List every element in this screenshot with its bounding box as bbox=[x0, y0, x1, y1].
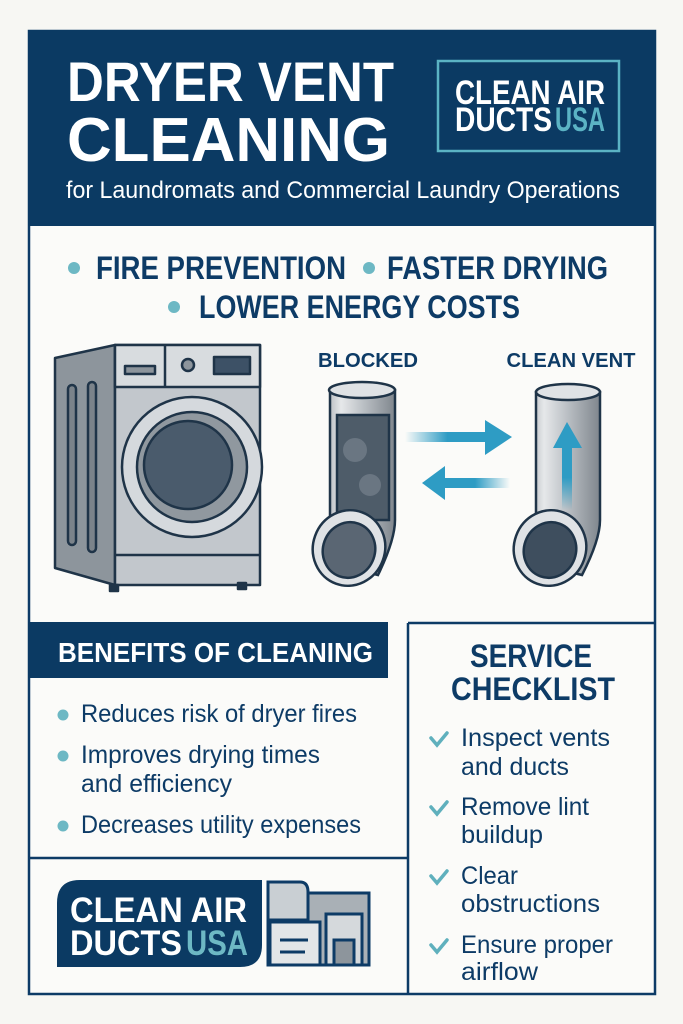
service checklist panel: Inspect vents bbox=[461, 724, 610, 752]
service checklist panel: CHECKLIST bbox=[451, 671, 615, 707]
service checklist panel: Remove lint bbox=[461, 793, 589, 821]
logo box top: DUCTS bbox=[455, 101, 552, 139]
bottom logo: DUCTS bbox=[70, 924, 182, 963]
logo box top: USA bbox=[555, 101, 605, 139]
service checklist panel: SERVICE bbox=[470, 638, 592, 674]
title: CLEANING bbox=[67, 106, 390, 175]
clean vent pipe bbox=[503, 384, 600, 596]
bottom logo: CLEAN AIR bbox=[70, 891, 247, 930]
benefits panel: Reduces risk of dryer fires bbox=[81, 700, 357, 728]
label: clean vent: CLEAN VENT bbox=[506, 350, 636, 372]
title: DRYER VENT bbox=[67, 50, 394, 113]
benefits panel: and efficiency bbox=[81, 770, 232, 798]
key benefits row: FASTER DRYING bbox=[387, 250, 608, 286]
service checklist panel: and ducts bbox=[461, 753, 569, 781]
icon: building bbox=[268, 882, 369, 965]
key benefits row: LOWER ENERGY COSTS bbox=[199, 289, 520, 325]
service checklist panel bbox=[431, 638, 615, 986]
service checklist panel: Ensure proper bbox=[461, 931, 613, 959]
benefits panel: Improves drying times bbox=[81, 741, 320, 769]
service checklist panel: Clear bbox=[461, 862, 518, 890]
bottom logo bbox=[57, 880, 369, 967]
blocked vent pipe bbox=[302, 382, 396, 596]
benefits panel: BENEFITS OF CLEANING bbox=[58, 637, 373, 668]
logo box top bbox=[438, 61, 619, 151]
header panel bbox=[28, 30, 656, 226]
benefits panel: Decreases utility expenses bbox=[81, 811, 361, 839]
key benefits row: FIRE PREVENTION bbox=[96, 250, 346, 286]
service checklist panel: airflow bbox=[461, 958, 539, 986]
washer illustration bbox=[55, 345, 262, 591]
arrows bbox=[405, 420, 512, 500]
label: blocked: BLOCKED bbox=[318, 350, 418, 372]
service checklist panel: obstructions bbox=[461, 890, 600, 918]
bottom logo: USA bbox=[186, 924, 248, 963]
subtitle: for Laundromats and Commercial Laundry Operations bbox=[66, 177, 620, 204]
service checklist panel: buildup bbox=[461, 821, 543, 849]
logo box top: CLEAN AIR bbox=[455, 74, 605, 112]
title bbox=[67, 50, 394, 175]
benefits panel bbox=[28, 622, 388, 839]
key benefits row bbox=[68, 250, 608, 325]
